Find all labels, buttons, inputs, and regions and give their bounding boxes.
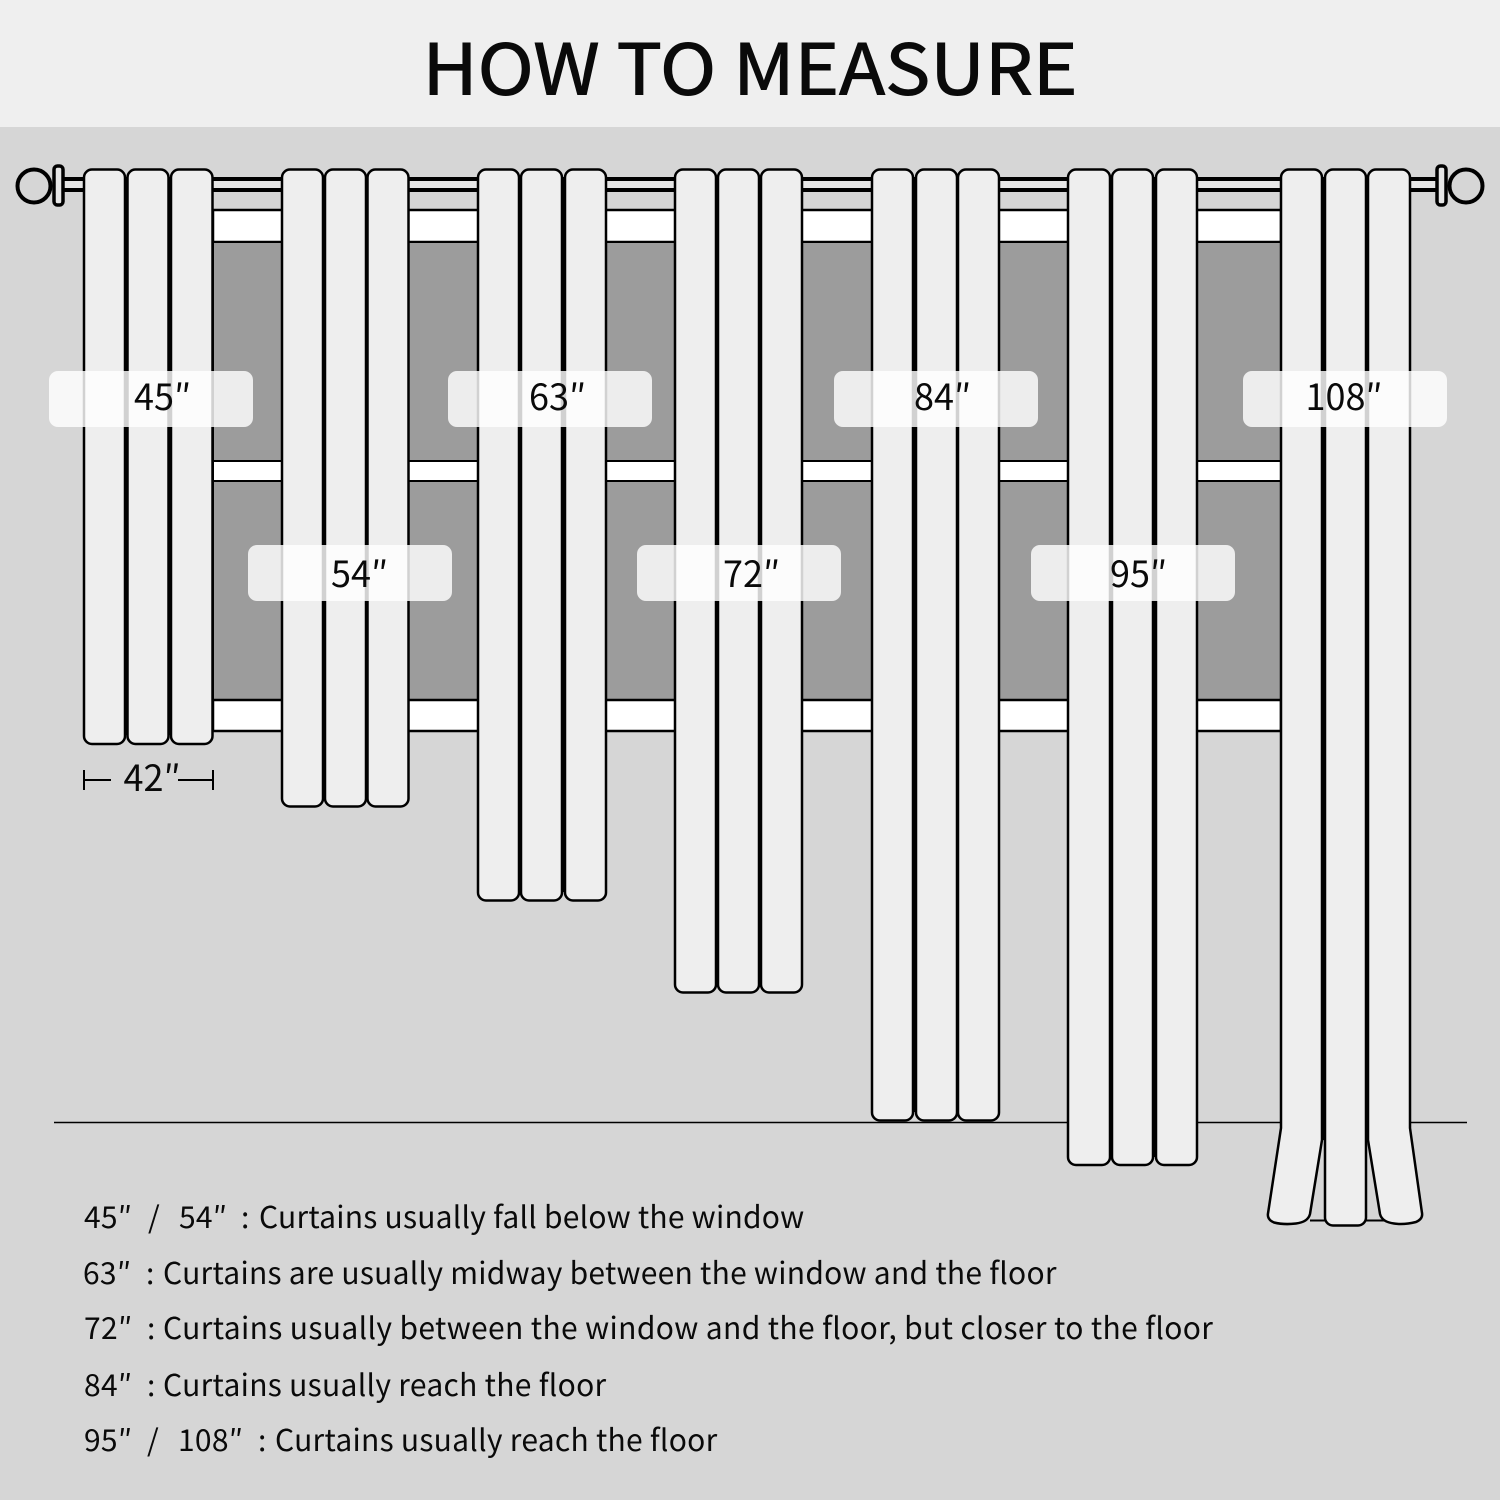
size label 84 xyxy=(834,369,1038,427)
size label 95 xyxy=(1031,545,1235,601)
floor line xyxy=(54,1122,1467,1124)
width dimension 42 inch: 42″ xyxy=(123,750,181,802)
curtain panels 84 inch xyxy=(872,170,999,1120)
legend notes: 63″ xyxy=(83,1249,131,1293)
size label 108 xyxy=(1243,369,1447,427)
curtain panels 108 inch xyxy=(1268,170,1422,1226)
curtain panels 72 inch xyxy=(675,170,802,992)
size label 45 xyxy=(49,369,253,427)
size label 45: 45″ xyxy=(134,369,191,421)
curtain rod xyxy=(18,166,1482,205)
legend notes: 84″ xyxy=(84,1361,132,1405)
size label 63 xyxy=(448,369,652,427)
curtain panels 54 inch xyxy=(282,170,408,806)
legend notes: Curtains are usually midway between the window and the floor xyxy=(163,1249,1057,1293)
title: HOW TO MEASURE xyxy=(422,14,1078,116)
window xyxy=(213,210,1281,731)
curtain panels 63 inch xyxy=(478,170,606,900)
size label 95: 95″ xyxy=(1110,546,1167,598)
legend notes: : xyxy=(147,1304,156,1348)
size label 63: 63″ xyxy=(529,369,586,421)
legend notes: Curtains usually fall below the window xyxy=(259,1193,804,1237)
size label 54 xyxy=(248,545,452,601)
legend notes xyxy=(83,1193,1213,1460)
width dimension 42 inch xyxy=(84,750,213,802)
legend notes: 72″ xyxy=(84,1304,133,1348)
legend notes: / xyxy=(147,1416,159,1460)
header band xyxy=(0,0,1500,127)
legend notes: Curtains usually reach the floor xyxy=(163,1361,607,1405)
legend notes: : xyxy=(241,1193,250,1237)
legend notes: 95″ xyxy=(84,1416,132,1460)
legend notes: : xyxy=(147,1361,156,1405)
size label 54: 54″ xyxy=(331,546,388,598)
legend notes: : xyxy=(146,1249,155,1293)
legend notes: 108″ xyxy=(178,1416,243,1460)
size label 72 xyxy=(637,545,841,601)
size label 72: 72″ xyxy=(723,546,780,598)
size label 84: 84″ xyxy=(914,369,971,421)
size label 108: 108″ xyxy=(1305,369,1383,421)
legend notes: : xyxy=(258,1416,267,1460)
legend notes: Curtains usually reach the floor xyxy=(275,1416,718,1460)
legend notes: Curtains usually between the window and the floor, but closer to the floor xyxy=(163,1304,1213,1348)
curtain panels 95 inch xyxy=(1068,170,1197,1165)
curtain panels 45 inch xyxy=(84,170,212,744)
legend notes: 45″ xyxy=(84,1193,132,1237)
legend notes: / xyxy=(148,1193,160,1237)
legend notes: 54″ xyxy=(179,1193,227,1237)
